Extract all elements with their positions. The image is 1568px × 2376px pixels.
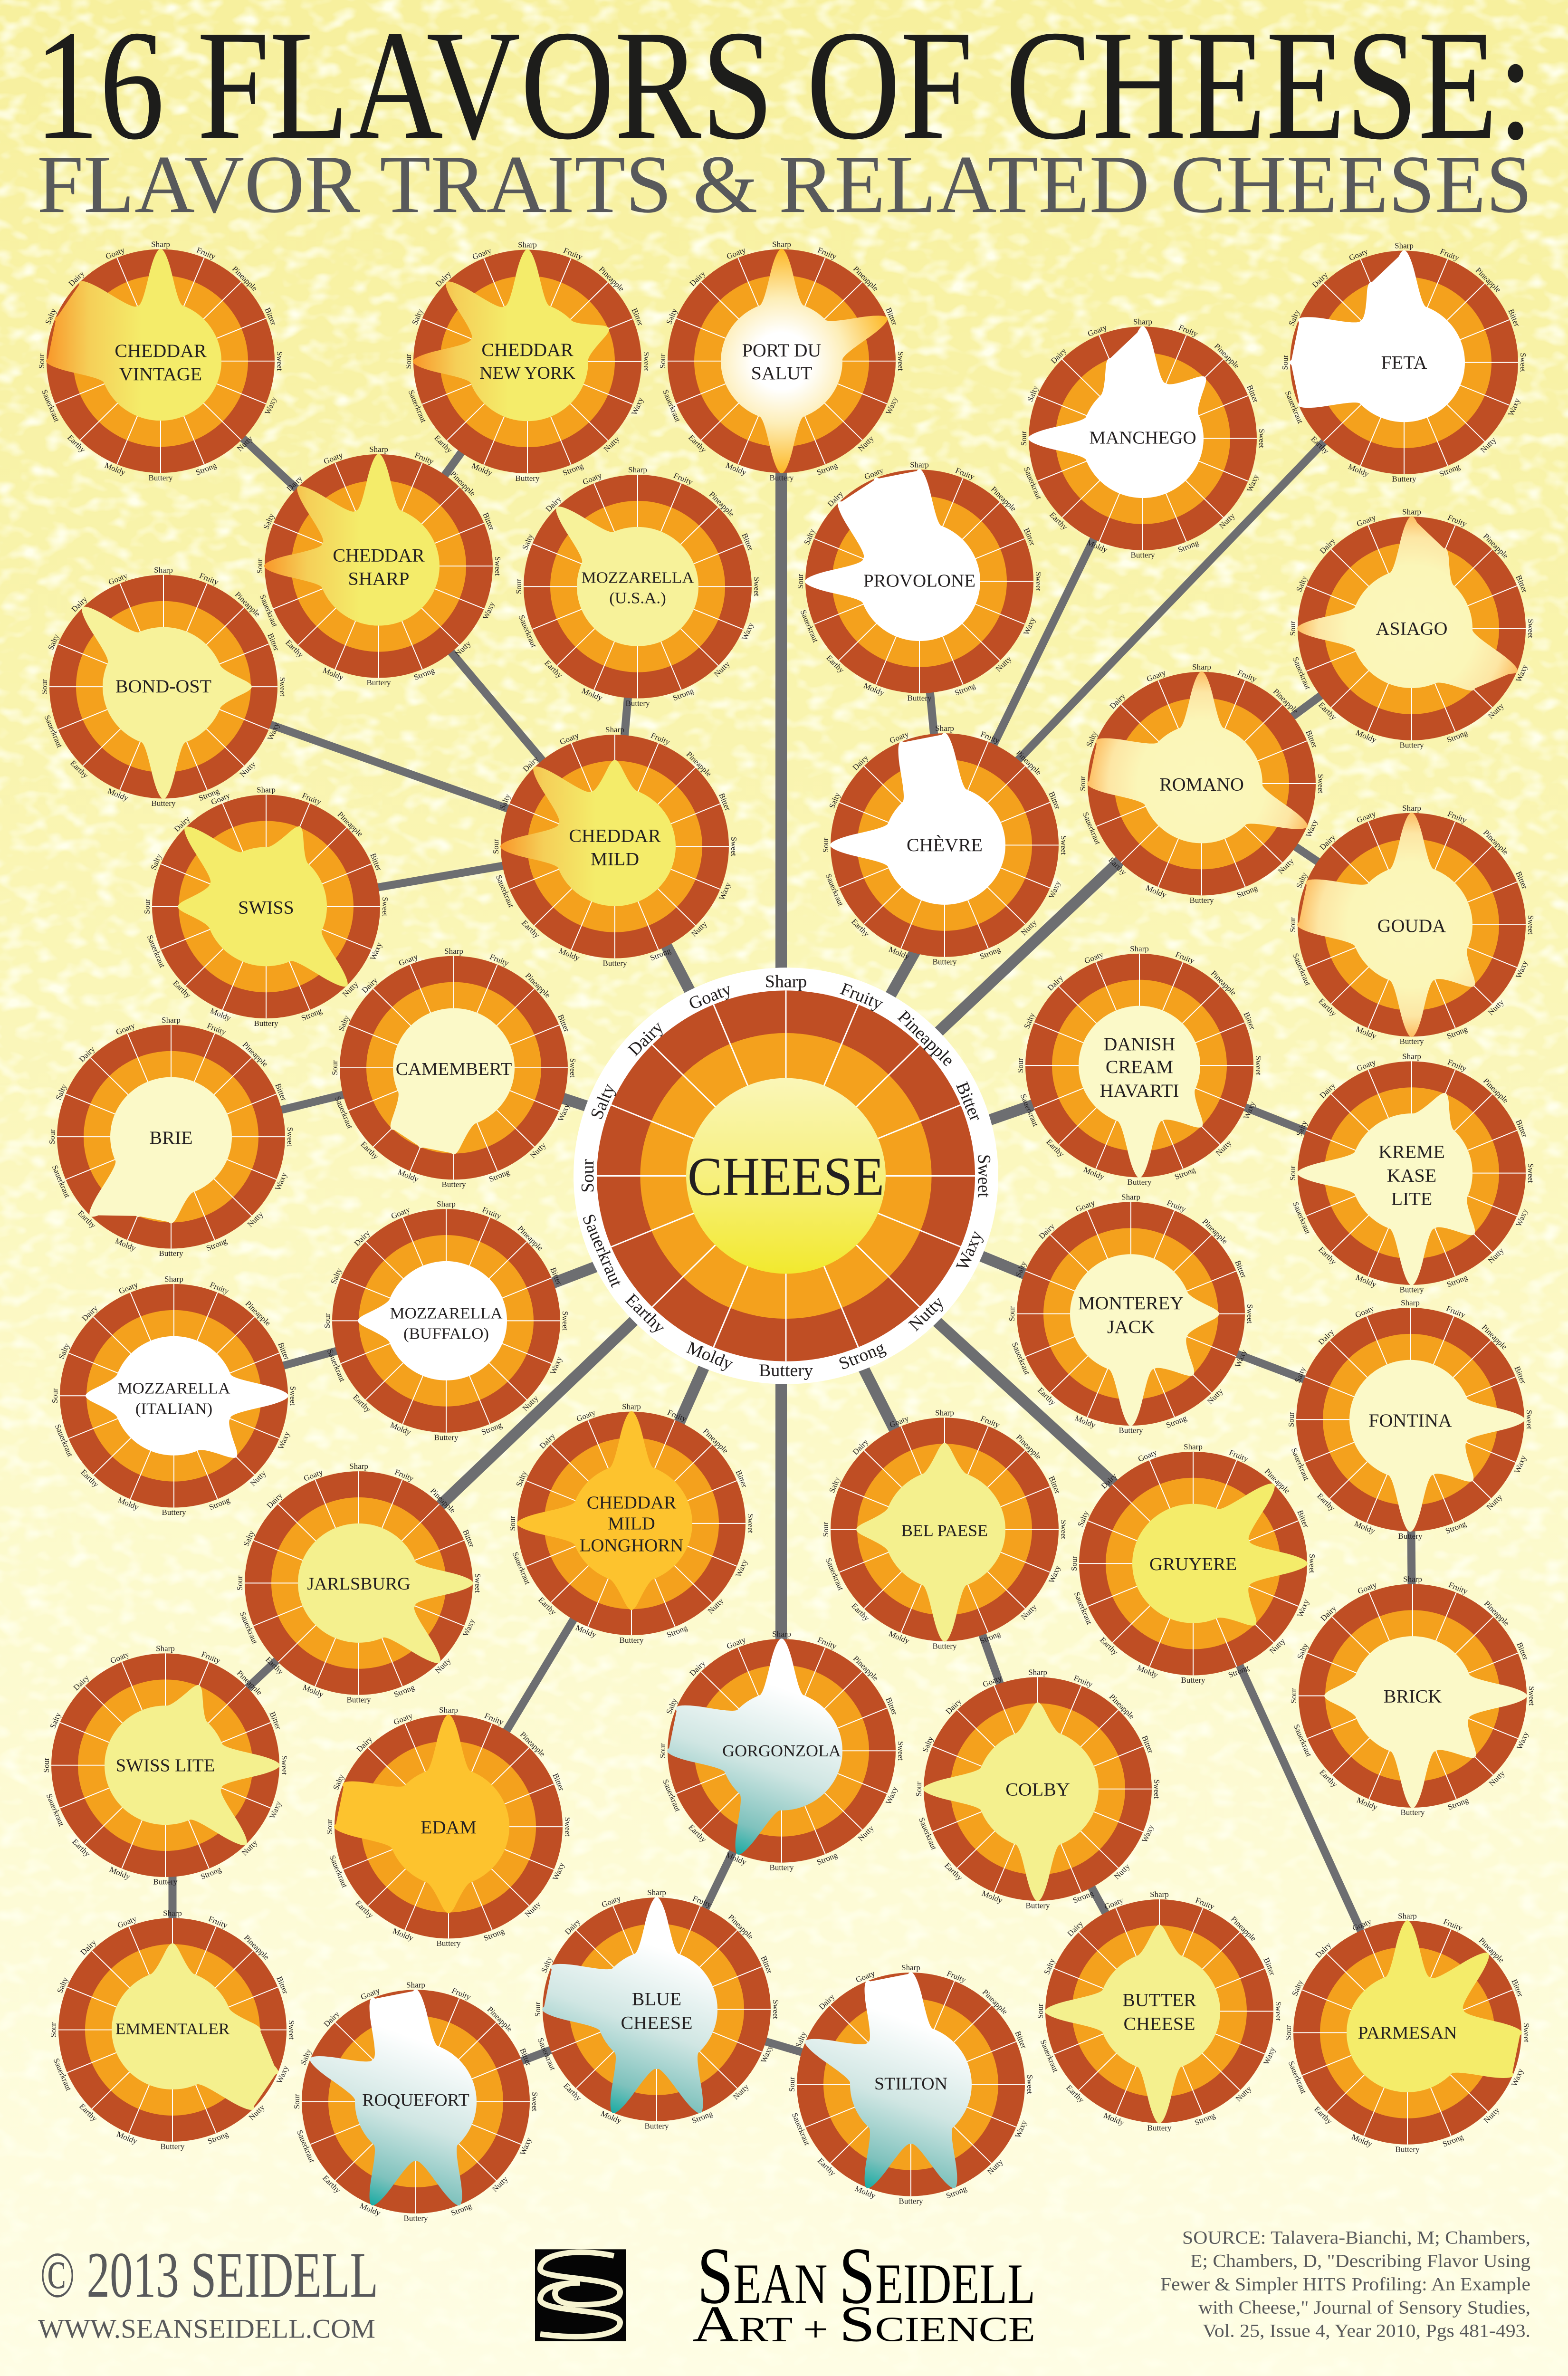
wheel: port du salut (658, 240, 905, 482)
name: CHEDDAR (569, 825, 661, 846)
flavor shape (1028, 326, 1222, 498)
flavor labels: Fruity (838, 979, 886, 1014)
wheel: cheddar mild longhorn (508, 1402, 755, 1645)
flavor shape (923, 1702, 1099, 1901)
flavor shape (112, 1943, 287, 2126)
wheel: camembert (330, 947, 577, 1189)
source citation: Vol. 25, Issue 4, Year 2010, Pgs 481-493. (1203, 2320, 1530, 2341)
wheel: danish cream havarti (1016, 944, 1263, 1187)
name: BEL PAESE (901, 1521, 988, 1540)
flavor shape (794, 1970, 1027, 2198)
wheel: stilton (787, 1963, 1034, 2205)
wheel: cheddar mild (491, 725, 738, 968)
name: CHEDDAR (481, 339, 574, 360)
flavor shape (540, 1895, 773, 2124)
name: EDAM (421, 1817, 477, 1838)
flavor shape (169, 811, 363, 1002)
name: MONTEREY (1078, 1293, 1184, 1313)
name: PROVOLONE (863, 571, 975, 591)
name: GORGONZOLA (722, 1741, 841, 1760)
flavor labels: Moldy (684, 1338, 736, 1374)
wheel: provolone (796, 460, 1043, 702)
wheel: parmesan (1284, 1911, 1531, 2154)
flavor shape (1070, 1254, 1219, 1426)
brand name: SEAN SEIDELL (697, 2231, 1035, 2321)
name: CHÈVRE (907, 835, 983, 855)
name: BUTTER (1122, 1990, 1196, 2010)
flavor shape (1295, 514, 1528, 743)
flavor shape (1295, 811, 1528, 1039)
wheel: gouda (1288, 804, 1535, 1046)
flavor labels: Nutty (905, 1292, 948, 1335)
flavor shape (262, 452, 495, 680)
wheel: mozzarella italian (50, 1274, 297, 1517)
flavor shape (1324, 1636, 1527, 1808)
flavor shape (830, 727, 1005, 905)
flavor shape (299, 1987, 532, 2216)
wheel: swiss lite (42, 1644, 289, 1887)
name: MOZZARELLA (117, 1380, 230, 1397)
flavor shape (358, 1261, 507, 1380)
source citation: SOURCE: Talavera-Bianchi, M; Chambers, (1182, 2227, 1530, 2248)
secondary links (161, 361, 1413, 2102)
name: CHEESE (1123, 2013, 1195, 2034)
wheel: brick (1289, 1575, 1536, 1817)
name: COLBY (1005, 1779, 1070, 1800)
name: BRIE (149, 1127, 193, 1148)
source citation: Fewer & Simpler HITS Profiling: An Example (1160, 2274, 1530, 2295)
flavor shape (74, 1077, 232, 1232)
name: MOZZARELLA (581, 569, 694, 586)
flavor shape (498, 732, 731, 961)
name: CHEESE (621, 2012, 693, 2033)
wheel: colby (914, 1668, 1161, 1910)
center disc (686, 1078, 886, 1274)
flavor shape (334, 1715, 509, 1913)
flavor shape (1349, 1360, 1525, 1532)
wheel: swiss (143, 786, 390, 1028)
source citation: with Cheese," Journal of Sensory Studies, (1198, 2297, 1530, 2318)
flavor shape (375, 1008, 515, 1157)
flavor labels (578, 972, 994, 1380)
name: ROMANO (1159, 774, 1244, 795)
name: MILD (591, 849, 639, 869)
main links (359, 361, 1202, 1751)
flavor labels: Buttery (759, 1360, 813, 1380)
name: STILTON (874, 2074, 947, 2094)
brand tagline: ART + SCIENCE (692, 2295, 1035, 2352)
name: KASE (1387, 1165, 1436, 1186)
name: SHARP (348, 568, 409, 589)
name: PORT DU (742, 340, 821, 361)
flavor shape (1297, 1084, 1491, 1285)
name: LITE (1391, 1188, 1432, 1209)
flavor shape (86, 1336, 288, 1473)
flavor shape (517, 1411, 692, 1610)
flavor shape (411, 248, 644, 476)
wheel: fontina (1287, 1298, 1534, 1541)
name: GRUYERE (1149, 1554, 1237, 1574)
name: BRICK (1384, 1686, 1442, 1706)
flavor shape (540, 491, 698, 646)
name: (BUFFALO) (403, 1325, 489, 1343)
flavor shape (1085, 670, 1318, 898)
flavor shape (66, 591, 252, 799)
name: CREAM (1106, 1056, 1173, 1077)
name: KREME (1378, 1141, 1445, 1162)
name: ASIAGO (1376, 618, 1448, 639)
flavor labels: Waxy (952, 1227, 987, 1273)
flavor shape (1079, 1006, 1218, 1178)
wheel: gorgonzola (658, 1629, 905, 1872)
wheel: romano (1078, 662, 1325, 905)
wheel: brie (48, 1016, 295, 1258)
name: BOND-OST (115, 676, 211, 697)
icon: seidell logo (535, 2249, 626, 2341)
name: CHEDDAR (333, 545, 425, 565)
wheel: roquefort (292, 1981, 539, 2223)
wheel: asiago (1288, 508, 1535, 749)
name: ROQUEFORT (362, 2090, 469, 2110)
wheel: edam (325, 1705, 572, 1948)
flavor shape (1045, 1925, 1220, 2124)
flavor labels: Sharp (765, 972, 807, 991)
name: SWISS LITE (115, 1756, 215, 1775)
center label: CHEESE (688, 1147, 884, 1207)
name: FETA (1381, 352, 1427, 373)
name: CAMEMBERT (396, 1059, 512, 1079)
wheel: cheddar vintage (37, 240, 284, 482)
flavor labels: Pineapple (894, 1007, 958, 1070)
name: EMMENTALER (115, 2020, 230, 2038)
flavor labels: Dairy (624, 1017, 668, 1060)
wheel: jarlsburg (235, 1462, 482, 1704)
wheel: feta (1281, 241, 1528, 484)
name: MANCHEGO (1089, 428, 1196, 448)
flavor shape (1283, 250, 1465, 427)
flavor labels: Strong (836, 1338, 888, 1374)
flavor shape (665, 1637, 898, 1865)
name: SALUT (751, 363, 812, 383)
flavor labels: Sour (578, 1159, 598, 1193)
name: PARMESAN (1358, 2023, 1457, 2043)
flavor labels: Salty (586, 1081, 619, 1122)
wheel: cheddar new york (404, 240, 651, 483)
flavor labels: Goaty (686, 979, 735, 1014)
name: MILD (608, 1514, 655, 1534)
name: LONGHORN (580, 1536, 683, 1556)
name: HAVARTI (1100, 1080, 1179, 1101)
wheel: kreme kase lite (1288, 1052, 1535, 1294)
copyright: © 2013 SEIDELL (40, 2239, 378, 2311)
name: DANISH (1103, 1034, 1176, 1054)
name: NEW YORK (479, 363, 575, 383)
wheel: bel paese (821, 1408, 1068, 1651)
wheel: emmentaler (49, 1909, 296, 2151)
main wheel: cheese (574, 968, 998, 1384)
flavor labels: Earthy (621, 1290, 669, 1337)
name: CHEDDAR (115, 340, 207, 361)
name: JARLSBURG (307, 1574, 411, 1594)
wheel: chevre (821, 724, 1068, 966)
flavor labels: Sauerkraut (578, 1211, 627, 1290)
name: MOZZARELLA (390, 1304, 503, 1322)
wheel: mozzarella buffalo (323, 1199, 570, 1442)
wheel: monterey jack (1007, 1193, 1254, 1435)
flavor shape (805, 463, 980, 641)
wheel: gruyere (1070, 1442, 1317, 1685)
flavor shape (1132, 1468, 1308, 1641)
subtitle: FLAVOR TRAITS & RELATED CHEESES (37, 139, 1532, 230)
name: SWISS (238, 897, 294, 918)
name: VINTAGE (119, 364, 202, 384)
flavor shape (298, 1523, 473, 1678)
flavor shape (1347, 1920, 1522, 2097)
flavor labels: Bitter (952, 1079, 986, 1124)
source citation (1160, 2227, 1530, 2341)
flavor shape (105, 1677, 280, 1861)
source citation: E; Chambers, D, "Describing Flavor Using (1190, 2251, 1530, 2271)
website: WWW.SEANSEIDELL.COM (38, 2314, 375, 2344)
flavor shape (856, 1443, 1005, 1642)
wheel: butter cheese (1036, 1890, 1283, 2132)
wheel: manchego (1019, 317, 1266, 559)
wheel: mozzarella usa (514, 465, 761, 708)
name: (ITALIAN) (135, 1400, 212, 1418)
name: BLUE (632, 1989, 681, 2010)
flavor shape (665, 247, 898, 475)
flavor shape (44, 247, 277, 475)
wheel: cheddar sharp (255, 445, 502, 687)
name: (U.S.A.) (609, 589, 666, 607)
name: GOUDA (1377, 915, 1446, 936)
name: JACK (1107, 1316, 1155, 1337)
wheel: bond-ost (40, 565, 287, 808)
connector lines (161, 361, 1413, 2102)
wheel: blue cheese (533, 1888, 780, 2130)
name: CHEDDAR (587, 1493, 676, 1513)
flavor labels: Sweet (974, 1154, 994, 1198)
name: FONTINA (1368, 1410, 1452, 1431)
